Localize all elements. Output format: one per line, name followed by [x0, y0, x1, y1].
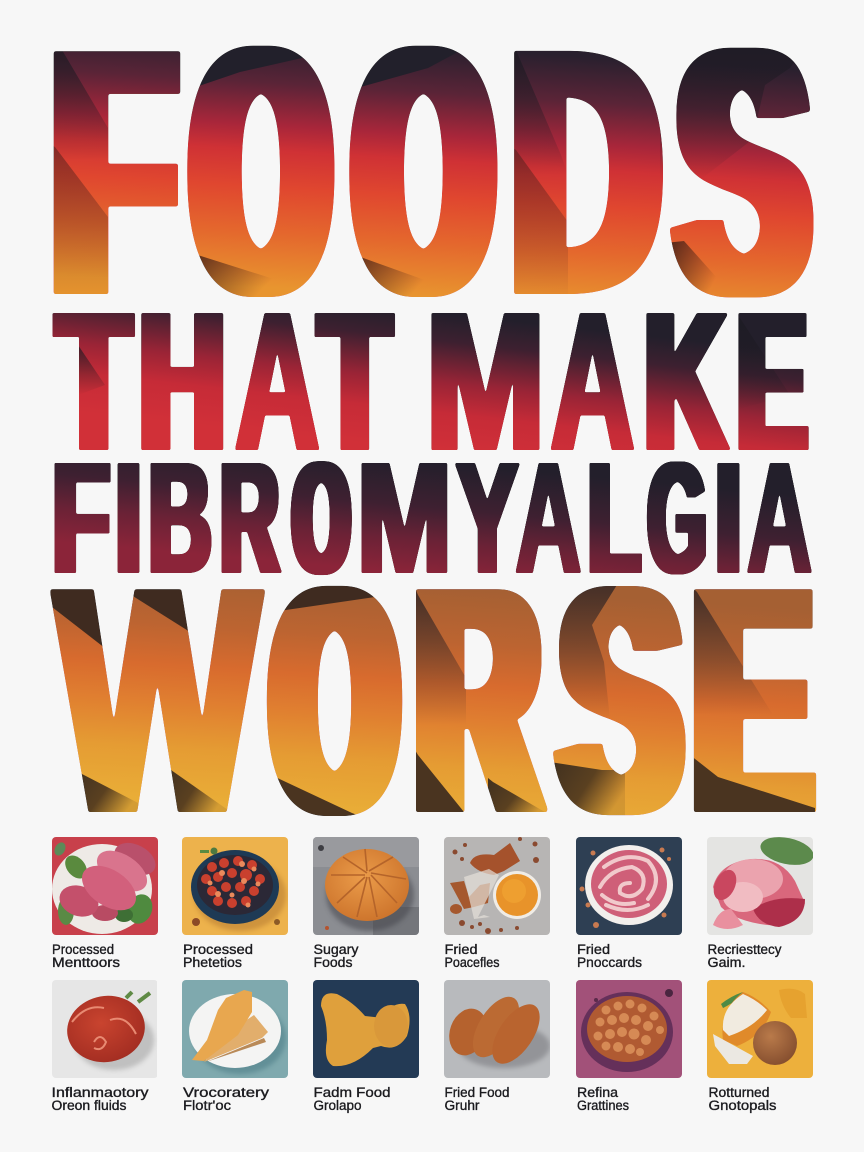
label: Flotr'oc — [183, 1098, 231, 1113]
title line: WORSE: O — [264, 533, 405, 881]
title lettering layer — [45, 0, 820, 881]
title line: FIBROMYALGIA: A — [747, 431, 812, 606]
card: cake slice — [182, 980, 288, 1113]
label: Inflanmaotory — [52, 1085, 149, 1100]
image: golden wedge on plate — [182, 980, 288, 1078]
label — [183, 942, 253, 970]
image: red marbled food — [52, 980, 157, 1078]
image: dark bowl with red food — [182, 837, 288, 935]
title line: FIBROMYALGIA: L — [588, 430, 641, 605]
image: orange bun on slate — [313, 837, 420, 935]
image: pink swirl in white bowl — [576, 837, 682, 935]
label — [708, 1085, 777, 1113]
title line: THAT MAKE: H — [139, 273, 225, 491]
label: Grattines — [577, 1098, 629, 1113]
title line: THAT MAKE: K — [645, 272, 725, 491]
title colour art behind the letters — [45, 40, 820, 822]
label: Gruhr — [444, 1098, 480, 1113]
title line: WORSE: W — [56, 522, 261, 878]
title line: FIBROMYALGIA: M — [357, 431, 452, 606]
label: Fadm Food — [314, 1085, 390, 1100]
title line: FIBROMYALGIA: I — [115, 432, 142, 606]
title line: FIBROMYALGIA: Y — [457, 432, 518, 606]
image: golden nugget on navy — [313, 980, 420, 1078]
label — [708, 942, 782, 970]
title line: THAT MAKE: M — [426, 273, 545, 491]
label: Gaim. — [708, 955, 746, 970]
card: refined carbs — [707, 980, 813, 1113]
label — [183, 1085, 269, 1113]
label: Gnotopals — [708, 1098, 777, 1113]
label: Phetetios — [183, 955, 242, 970]
title line: THAT MAKE: T — [319, 273, 390, 492]
image: bread and bun on yellow — [707, 980, 813, 1078]
card: fried food — [443, 980, 552, 1113]
title line: FIBROMYALGIA: O — [289, 435, 354, 607]
card: pink meat with leaf — [707, 833, 816, 970]
label: Menttoors — [52, 955, 120, 970]
label — [52, 1085, 149, 1113]
title line: THAT MAKE: A — [551, 273, 634, 492]
card: fried foods with dip — [444, 837, 552, 970]
title line: WORSE: S — [560, 522, 681, 878]
label — [577, 1085, 629, 1113]
label — [577, 942, 642, 970]
image: cut pink meat and leaf — [707, 833, 816, 935]
label — [52, 942, 120, 970]
title — [45, 0, 820, 881]
label: Sugary — [314, 942, 359, 957]
label: Foods — [314, 955, 353, 970]
label: Fried Food — [444, 1085, 510, 1100]
label — [314, 942, 359, 970]
card: sugary foods — [313, 837, 420, 970]
label: Fried — [577, 942, 610, 957]
label: Refina — [577, 1085, 619, 1100]
label — [444, 1085, 510, 1113]
label: Rotturned — [708, 1085, 770, 1100]
title line: THAT MAKE — [57, 272, 807, 492]
title line: FOODS — [54, 0, 808, 370]
title line: WORSE — [56, 522, 811, 881]
label: Recriesttecy — [708, 942, 782, 957]
label: Fried — [444, 942, 478, 957]
title line: WORSE: R — [417, 522, 539, 877]
title line: FIBROMYALGIA: R — [220, 430, 279, 606]
card: swirl bowl — [576, 837, 682, 970]
title line: FIBROMYALGIA: B — [149, 430, 211, 605]
title line: FIBROMYALGIA: G — [648, 431, 707, 606]
card: inflammatory red food — [52, 980, 157, 1113]
title line: THAT MAKE: A — [235, 273, 319, 492]
label: Vrocoratery — [183, 1085, 269, 1100]
card: refined bowl — [576, 980, 682, 1113]
title line: THAT MAKE: E — [737, 273, 807, 491]
card: processed bowl — [182, 837, 288, 970]
label: Processed — [183, 942, 253, 957]
label: Grolapo — [314, 1098, 362, 1113]
label: Processed — [52, 942, 114, 957]
card: golden nugget — [313, 980, 420, 1113]
label: Pnoccards — [577, 955, 642, 970]
title line: WORSE: E — [694, 524, 811, 878]
title line: FIBROMYALGIA — [52, 430, 812, 607]
image: sliced meat on plate — [52, 836, 161, 935]
title line: FIBROMYALGIA: A — [516, 431, 581, 606]
image: three fried pieces — [443, 980, 552, 1078]
label — [444, 942, 500, 970]
image: fried pieces and orange dip — [444, 837, 552, 935]
title line: THAT MAKE: T — [57, 273, 130, 491]
title line: FIBROMYALGIA: F — [52, 432, 110, 606]
label — [314, 1085, 390, 1113]
title line: FIBROMYALGIA: I — [715, 430, 742, 606]
label: Poacefles — [444, 955, 500, 970]
image: purple bowl of beans — [576, 980, 682, 1078]
card: processed meat platter — [52, 836, 161, 970]
label: Oreon fluids — [52, 1098, 127, 1113]
